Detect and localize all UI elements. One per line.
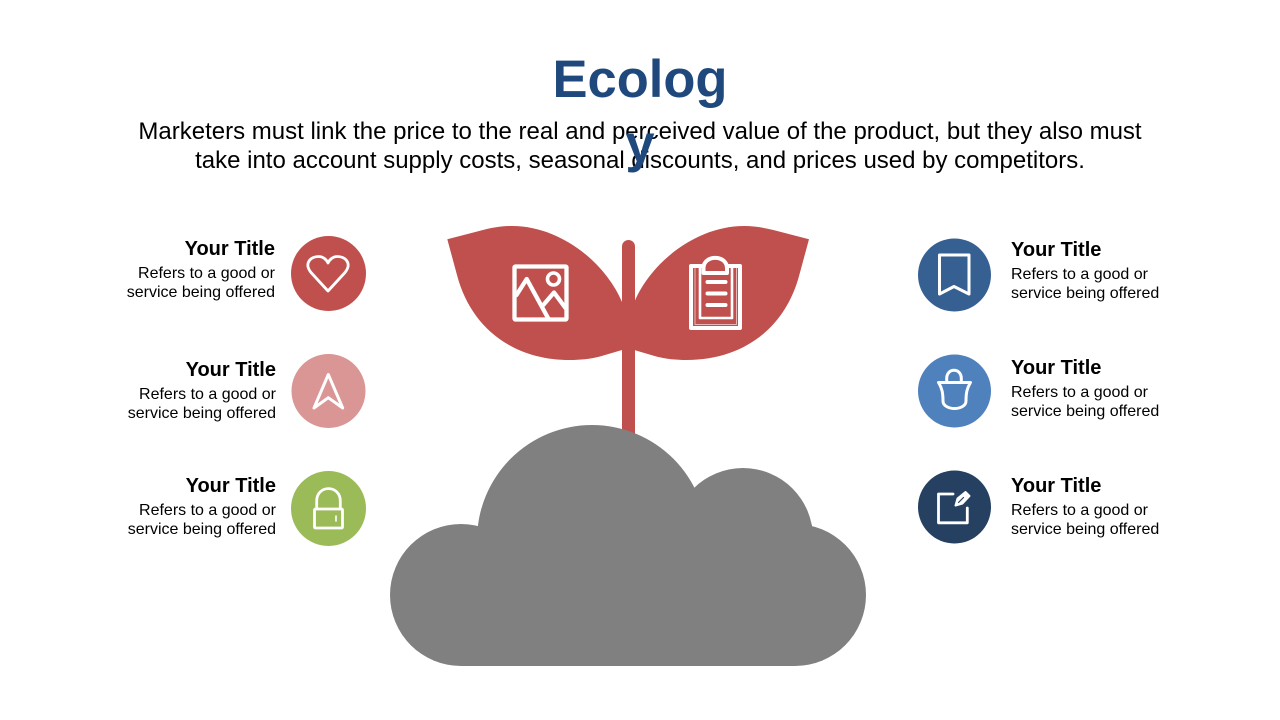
cloud [390, 425, 866, 666]
title: y [625, 114, 655, 174]
title: Ecolog [552, 50, 728, 109]
text: right 2: service being offered [1011, 403, 1159, 420]
text: left 3 [128, 475, 277, 538]
text: right 3: Refers to a good or [1011, 502, 1149, 519]
stem [622, 240, 635, 450]
right leaf [628, 226, 809, 360]
text: left 1: Your Title [185, 238, 275, 260]
text: right 1: Refers to a good or [1011, 266, 1149, 283]
text: right 2: Refers to a good or [1011, 384, 1149, 401]
intro paragraph [138, 118, 1142, 174]
item: left 2 [128, 354, 366, 428]
text: left 3: Your Title [186, 475, 276, 497]
icon: padlock badge [291, 471, 366, 546]
item: left 3 [128, 471, 366, 546]
text: left 3: service being offered [128, 521, 276, 538]
item: right 2 [918, 354, 1159, 428]
icon: edit badge [918, 470, 991, 544]
text: left 3: Refers to a good or [139, 502, 277, 519]
item: right 3 [918, 470, 1159, 544]
left leaf [447, 226, 628, 360]
text: right 2: Your Title [1011, 357, 1101, 379]
plant sprout [447, 226, 809, 450]
text: left 1: service being offered [127, 284, 275, 301]
icon: navigation arrow badge [292, 354, 366, 428]
icon: picture [514, 266, 566, 320]
text: right 1: service being offered [1011, 285, 1159, 302]
text: right 1: Your Title [1011, 239, 1101, 261]
icon: bag badge [918, 354, 991, 428]
text: right 2 [1011, 357, 1159, 420]
icon: bookmark badge [918, 238, 991, 312]
title [552, 50, 728, 174]
item: left 1 [127, 236, 366, 311]
icon: heart badge [291, 236, 366, 311]
text: left 2 [128, 359, 277, 422]
text: left 2: Refers to a good or [139, 386, 277, 403]
text: right 3: service being offered [1011, 521, 1159, 538]
text: right 3 [1011, 475, 1159, 538]
text: right 3: Your Title [1011, 475, 1101, 497]
text: left 1: Refers to a good or [138, 265, 276, 282]
item: right 1 [918, 238, 1159, 312]
text: left 2: service being offered [128, 405, 276, 422]
intro paragraph: Marketers must link the price to the real and perceived value of the product, but they also must [138, 118, 1142, 145]
icon: clipboard [691, 258, 740, 328]
text: right 1 [1011, 239, 1159, 302]
intro paragraph: take into account supply costs, seasonal discounts, and prices used by competitors. [195, 147, 1085, 174]
text: left 2: Your Title [186, 359, 276, 381]
text: left 1 [127, 238, 276, 301]
